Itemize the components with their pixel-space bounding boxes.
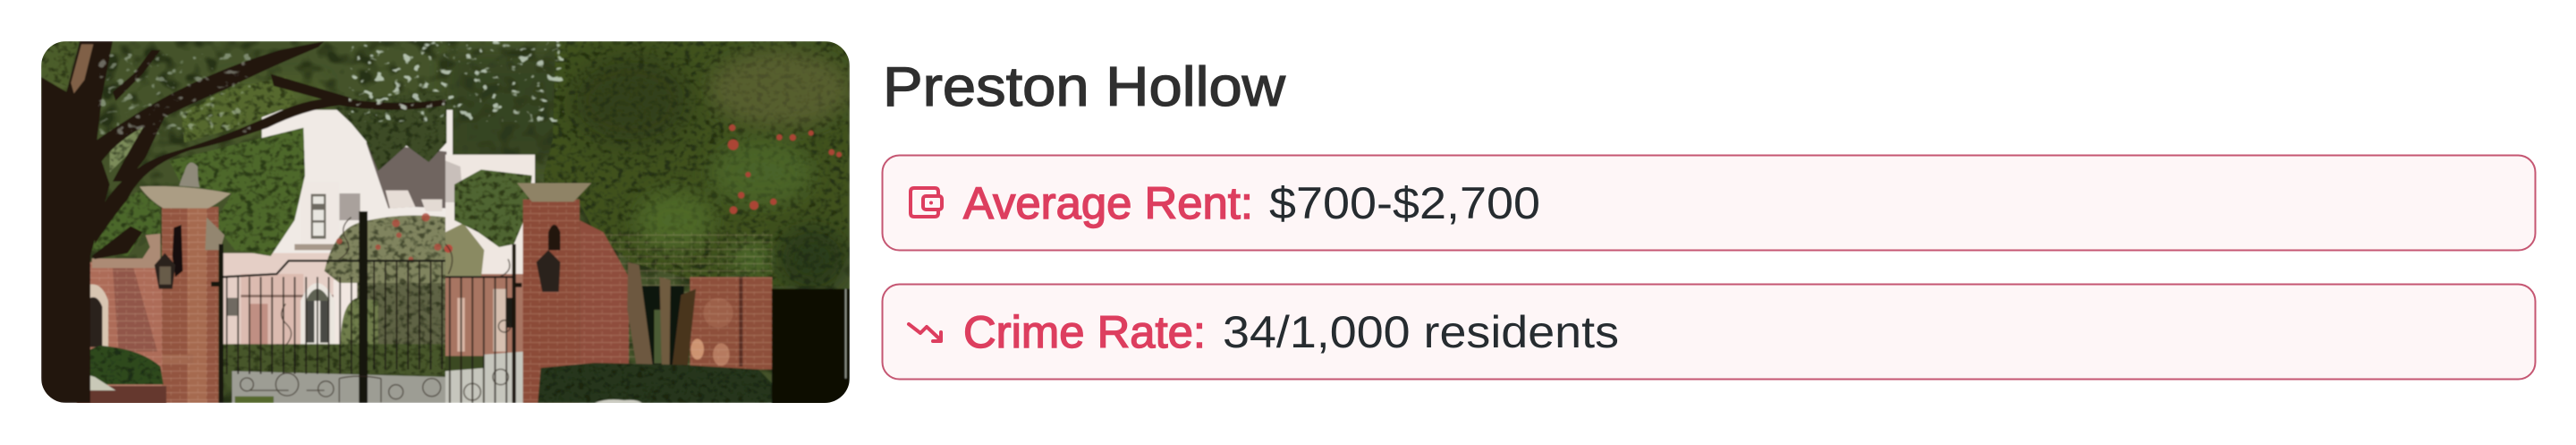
hedge xyxy=(538,363,792,403)
dark shrub corner xyxy=(772,289,850,406)
canopy droop over the roof xyxy=(327,92,446,171)
sky speckles through canopy xyxy=(98,41,564,134)
canopy tone variations xyxy=(45,45,617,161)
pillar xyxy=(140,162,231,403)
neighbourhood card xyxy=(41,41,2537,403)
photo: gated brick entrance under trees xyxy=(41,41,851,406)
icon: trending down arrow xyxy=(909,324,941,341)
branches and main trunk xyxy=(41,41,445,403)
upper tree xyxy=(544,41,848,286)
left half of photo xyxy=(41,41,453,404)
right wall xyxy=(580,220,772,370)
panel: average rent xyxy=(882,156,2535,251)
icon: wallet xyxy=(911,188,942,217)
gap between trunks xyxy=(640,286,684,366)
house upper walls and sky xyxy=(262,110,453,259)
lantern xyxy=(537,250,560,292)
label: crime rate: Crime Rate: xyxy=(963,307,1206,357)
trunk highlight xyxy=(71,44,93,93)
under-arch foliage xyxy=(169,128,305,256)
gate scrollwork xyxy=(241,218,441,402)
gate bars xyxy=(211,211,445,403)
canopy base xyxy=(41,41,850,403)
lower house wall xyxy=(223,253,366,348)
wall xyxy=(89,233,163,387)
label: average rent: Average Rent: xyxy=(963,178,1253,228)
bush xyxy=(77,346,166,404)
upper lit leaves xyxy=(182,77,298,142)
gate leaf xyxy=(445,244,521,403)
value: average rent: $700-$2,700 xyxy=(1269,178,1540,228)
foliage over roof xyxy=(454,169,532,247)
blossoms xyxy=(728,124,842,214)
driveway xyxy=(232,371,446,403)
lantern xyxy=(155,225,182,289)
soft tone patches on the tree xyxy=(571,50,851,292)
value: crime rate: 34/1,000 residents xyxy=(1223,307,1619,357)
panel: crime rate xyxy=(882,285,2535,380)
lawn xyxy=(220,344,450,374)
heading: Preston Hollow xyxy=(883,56,1285,118)
trunk-side leaves xyxy=(41,41,79,86)
hedge flowers at base xyxy=(595,399,642,403)
flowering shrub and green bushes xyxy=(324,212,447,346)
trunks xyxy=(627,262,696,367)
pillar xyxy=(517,183,591,403)
right half of photo xyxy=(445,41,851,406)
house beyond gate xyxy=(445,155,535,403)
